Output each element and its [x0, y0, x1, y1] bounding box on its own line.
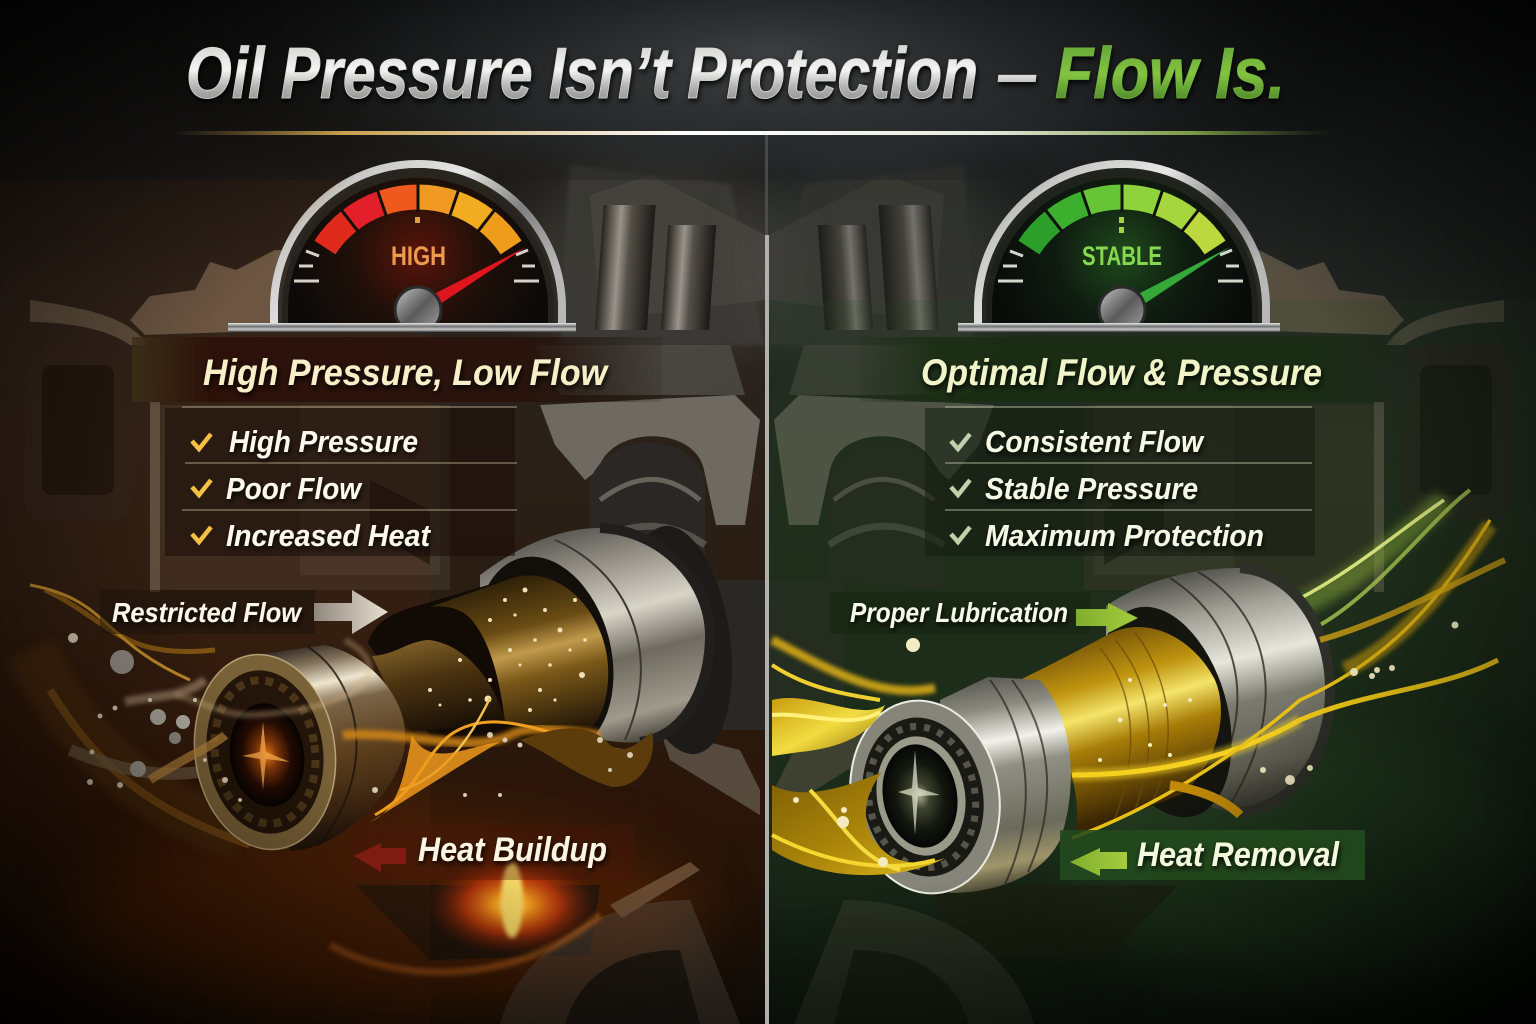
left bearing scene — [30, 519, 746, 859]
left neck — [372, 640, 505, 732]
panel: right heading — [860, 337, 1400, 402]
background: left panel — [0, 0, 768, 1024]
gauge reading: STABLE: STABLE — [1082, 241, 1162, 271]
yellow oil ribbons — [772, 520, 1505, 875]
right rear collar — [1076, 568, 1330, 833]
callout: Heat Buildup: Heat Buildup — [418, 831, 607, 869]
gauge needle — [1140, 247, 1230, 304]
shaft grooves — [1100, 632, 1168, 818]
gauge hub — [1099, 287, 1145, 333]
green tint over right engine — [770, 300, 1536, 1024]
gauge colour band — [325, 182, 511, 248]
item: Consistent Flow: Consistent Flow — [985, 424, 1205, 459]
oil swirl behind left bearing — [30, 585, 250, 845]
hole spark left — [242, 722, 290, 790]
right front bearing — [835, 677, 1071, 905]
arrow: restricted flow — [314, 590, 388, 634]
gauge ticks — [998, 250, 1243, 281]
item: Maximum Protection: Maximum Protection — [985, 518, 1264, 553]
callout: Heat Buildup — [350, 825, 635, 880]
gauge base bar — [228, 323, 576, 332]
item: Poor Flow: Poor Flow — [226, 471, 363, 506]
left front bearing — [182, 645, 405, 859]
title: Flow Is. — [1055, 34, 1285, 114]
gauge hub — [395, 287, 441, 333]
engine backdrop: left — [25, 150, 785, 1024]
panel: right heading: Optimal Flow & Pressure — [921, 352, 1322, 393]
callout: Proper Lubrication — [830, 592, 1138, 634]
gauge base bar — [958, 323, 1280, 332]
left rear collar — [457, 519, 746, 768]
center divider — [765, 135, 769, 1024]
callout: Proper Lubrication: Proper Lubrication — [850, 597, 1068, 628]
left gold sleeve — [430, 575, 608, 739]
left sleeve dark face — [368, 575, 608, 739]
gauge colour band — [1029, 182, 1215, 248]
right splash droplets — [793, 622, 1458, 867]
right gold shaft — [1000, 627, 1221, 835]
gauge ticks — [294, 250, 539, 281]
callout: Restricted Flow — [100, 590, 388, 634]
warm tint over left engine — [0, 180, 430, 1024]
title: — — [997, 34, 1037, 114]
gauge needle — [436, 247, 526, 304]
left droplets on sleeve — [428, 588, 587, 712]
gauge: stable — [958, 164, 1280, 333]
arrow: heat buildup — [354, 843, 406, 872]
heat glow — [330, 855, 700, 972]
green streaks — [1297, 490, 1470, 625]
arrow: proper lubrication — [1076, 603, 1138, 633]
left flare — [370, 735, 500, 822]
panel: right checklist — [925, 407, 1315, 556]
gauge: high pressure — [228, 164, 576, 333]
callout: Heat Removal — [1060, 830, 1365, 880]
gauge reading: HIGH: HIGH — [391, 241, 446, 271]
left oil ribbons in front — [150, 640, 650, 815]
background: title band glow — [0, 0, 1536, 180]
panel: left heading — [132, 337, 662, 402]
item: Stable Pressure: Stable Pressure — [985, 471, 1198, 506]
title: Oil Pressure Isn’t Protection — [186, 34, 978, 114]
item: Increased Heat: Increased Heat — [226, 518, 432, 553]
panel: left checklist — [165, 407, 517, 556]
panel: left heading: High Pressure, Low Flow — [203, 352, 609, 393]
callout: Restricted Flow: Restricted Flow — [112, 597, 303, 628]
engine backdrop: right — [749, 150, 1509, 1024]
item: High Pressure: High Pressure — [229, 424, 418, 459]
right bearing scene — [772, 490, 1505, 905]
background: right panel — [768, 0, 1536, 1024]
arrow: heat removal — [1070, 848, 1127, 876]
callout: Heat Removal: Heat Removal — [1137, 836, 1340, 874]
left oil pool — [520, 728, 653, 787]
left splash droplets — [68, 633, 633, 802]
title rule — [170, 131, 1330, 135]
right hole spark — [898, 750, 940, 835]
